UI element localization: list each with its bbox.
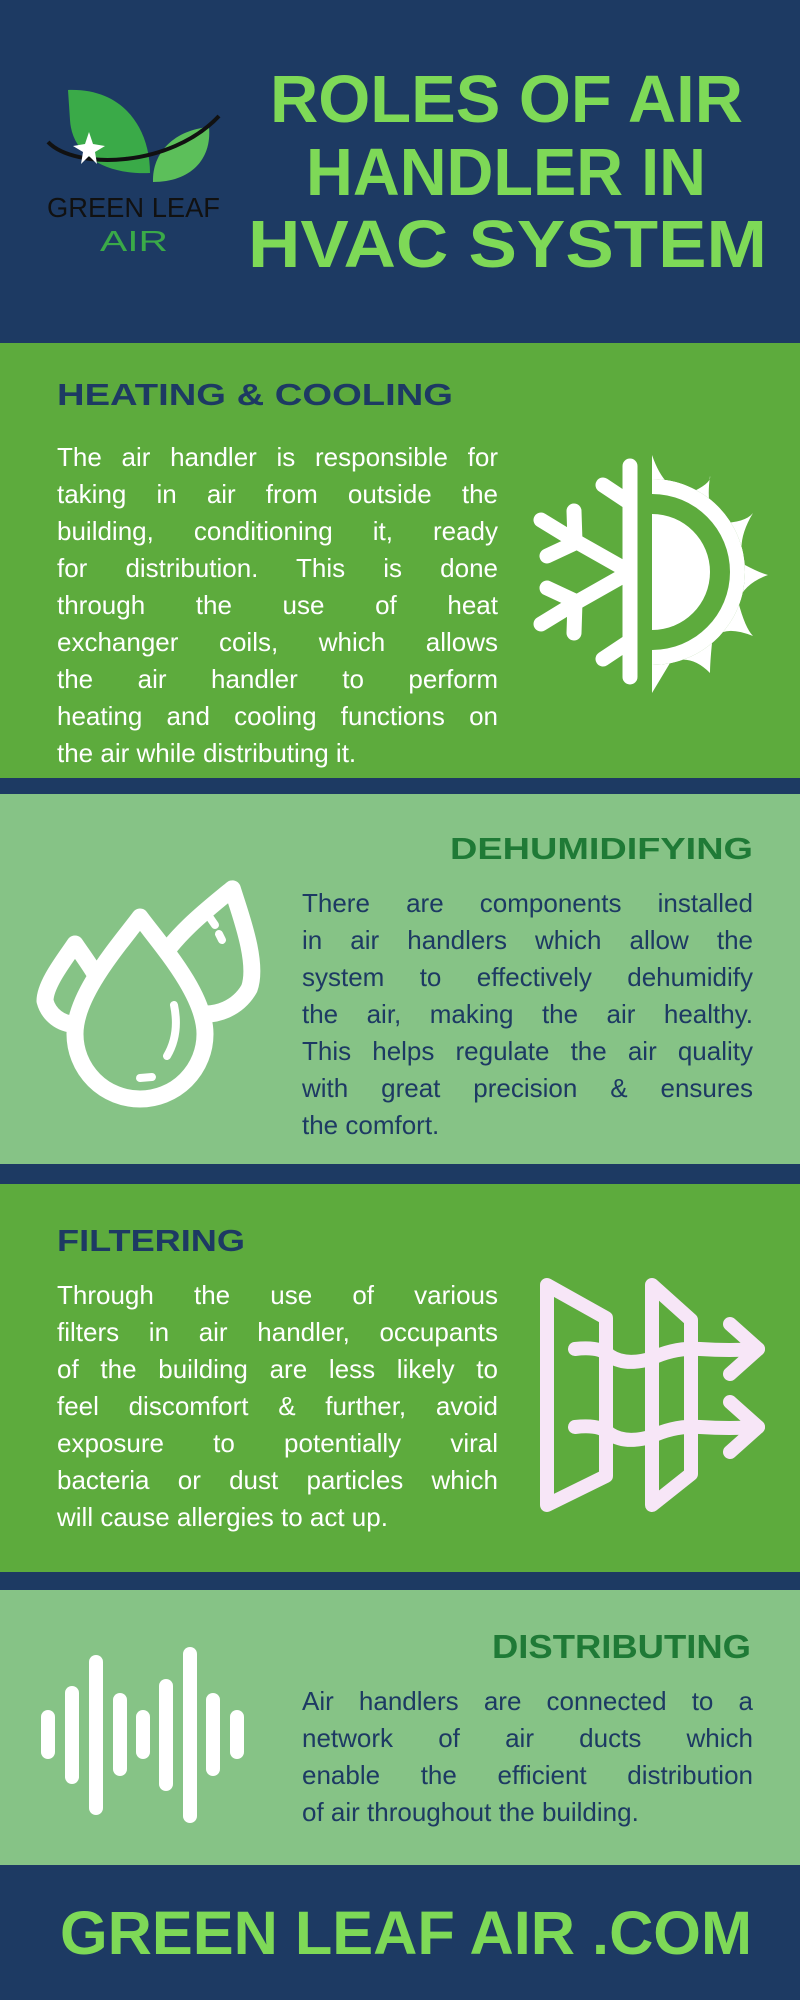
heading: DISTRIBUTING: [492, 1628, 751, 1665]
body text: exchanger coils, which allows: [57, 627, 498, 657]
body text: bacteria or dust particles which: [57, 1465, 498, 1495]
icon: star: [73, 132, 105, 164]
title: [248, 62, 767, 282]
body text: of the building are less likely to: [57, 1354, 498, 1384]
body text: filters in air handler, occupants: [57, 1317, 498, 1347]
body text: [57, 1280, 498, 1532]
body text: the air handler to perform: [57, 664, 498, 694]
heading: HEATING & COOLING: [57, 377, 453, 412]
body text: in air handlers which allow the: [302, 925, 753, 955]
body text: This helps regulate the air quality: [302, 1036, 753, 1066]
logo: [46, 90, 220, 258]
header: [0, 0, 800, 343]
footer text: GREEN LEAF AIR .COM: [60, 1899, 752, 1967]
body text: Through the use of various: [57, 1280, 498, 1310]
body text: the air while distributing it.: [57, 738, 356, 768]
footer: [0, 1865, 800, 2000]
icon: small leaf: [153, 127, 209, 182]
icon: sound wave: [41, 1647, 244, 1823]
body text: feel discomfort & further, avoid: [57, 1391, 498, 1421]
body text: heating and cooling functions on: [57, 701, 498, 731]
panel: filtering: [0, 1184, 800, 1572]
icon: big leaf: [68, 90, 150, 173]
title: HANDLER IN: [306, 135, 706, 210]
body text: with great precision & ensures: [302, 1073, 753, 1103]
title: HVAC SYSTEM: [248, 207, 767, 282]
logo text: GREEN LEAF: [47, 192, 220, 223]
icon: snowflake sun: [534, 455, 768, 693]
body text: Air handlers are connected to a: [302, 1686, 753, 1716]
body text: system to effectively dehumidify: [302, 962, 753, 992]
body text: exposure to potentially viral: [57, 1428, 498, 1458]
body text: enable the efficient distribution: [302, 1760, 753, 1790]
panel: dehumidifying: [0, 794, 800, 1164]
body text: for distribution. This is done: [57, 553, 498, 583]
icon: water drops: [36, 880, 260, 1108]
title: ROLES OF AIR: [270, 62, 743, 137]
panel: distributing: [0, 1590, 800, 1865]
icon: swoosh: [48, 116, 219, 160]
body text: of air throughout the building.: [302, 1797, 639, 1827]
body text: [302, 1686, 753, 1827]
body text: the comfort.: [302, 1110, 439, 1140]
panel: heating & cooling: [0, 343, 800, 778]
icon: filter with arrows: [540, 1278, 765, 1512]
heading: FILTERING: [57, 1223, 245, 1258]
body text: [57, 442, 498, 768]
logo: AIR: [100, 226, 168, 258]
heading: DEHUMIDIFYING: [450, 831, 753, 866]
body text: [302, 888, 753, 1140]
body text: network of air ducts which: [302, 1723, 753, 1753]
body text: The air handler is responsible for: [57, 442, 498, 472]
body text: will cause allergies to act up.: [57, 1502, 388, 1532]
body text: There are components installed: [302, 888, 753, 918]
body text: building, conditioning it, ready: [57, 516, 498, 546]
body text: the air, making the air healthy.: [302, 999, 753, 1029]
body text: taking in air from outside the: [57, 479, 498, 509]
body text: through the use of heat: [57, 590, 498, 620]
